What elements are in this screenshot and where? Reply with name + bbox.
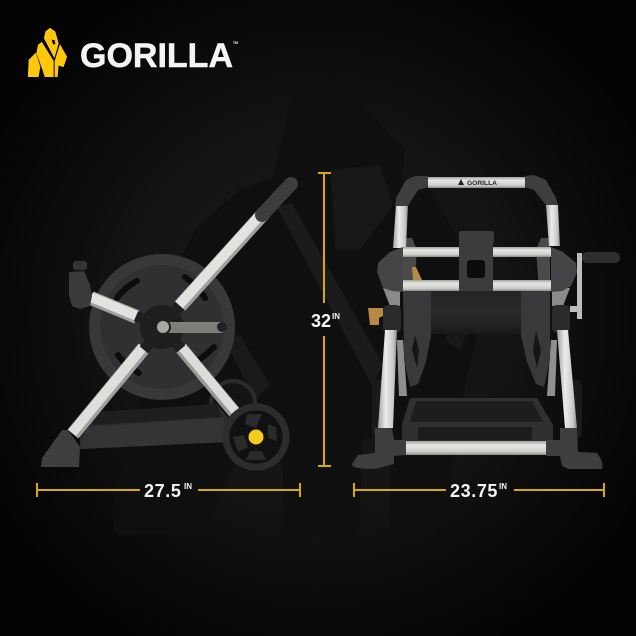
crank arm [156,320,227,334]
front legs [378,330,577,428]
right hub [552,305,570,333]
brass fittings [368,267,422,325]
front bar [406,441,546,455]
depth dimension: 27.5 [144,481,181,501]
hub and brackets [136,306,181,350]
background gorilla watermark [113,75,482,535]
front view hose reel [352,175,620,469]
height dimension [311,173,340,466]
icon: gorilla [28,28,67,77]
width dimension: 23.75 [450,481,498,501]
side view hose reel [41,184,291,467]
upper clamp [69,261,92,309]
handle grip [262,184,291,215]
height dimension: 32 [311,311,331,331]
front wheel [226,407,286,467]
logo [28,28,238,77]
depth dimension [37,481,300,501]
crossbars [403,247,551,291]
reel drum and flanges [403,238,550,387]
trademark: TM [233,41,238,45]
width dimension [354,481,604,501]
handle logo: GORILLA [467,181,498,187]
tray [402,398,553,455]
back wheels [372,380,582,438]
foot [41,430,80,467]
top handle [395,175,558,206]
reel disc [89,254,235,400]
aluminium arms [72,212,264,434]
centre bracket [459,231,494,291]
rear legs [397,340,557,396]
wordmark: GORILLA [80,37,233,75]
height dimension: IN [332,312,340,321]
back wheel [211,381,255,425]
width dimension: IN [499,482,507,491]
feet [352,428,602,469]
uprights [393,205,560,248]
side brackets [377,247,577,306]
crank handle [570,252,620,319]
depth dimension: IN [184,482,192,491]
left hub [383,305,401,333]
tray [80,404,228,449]
